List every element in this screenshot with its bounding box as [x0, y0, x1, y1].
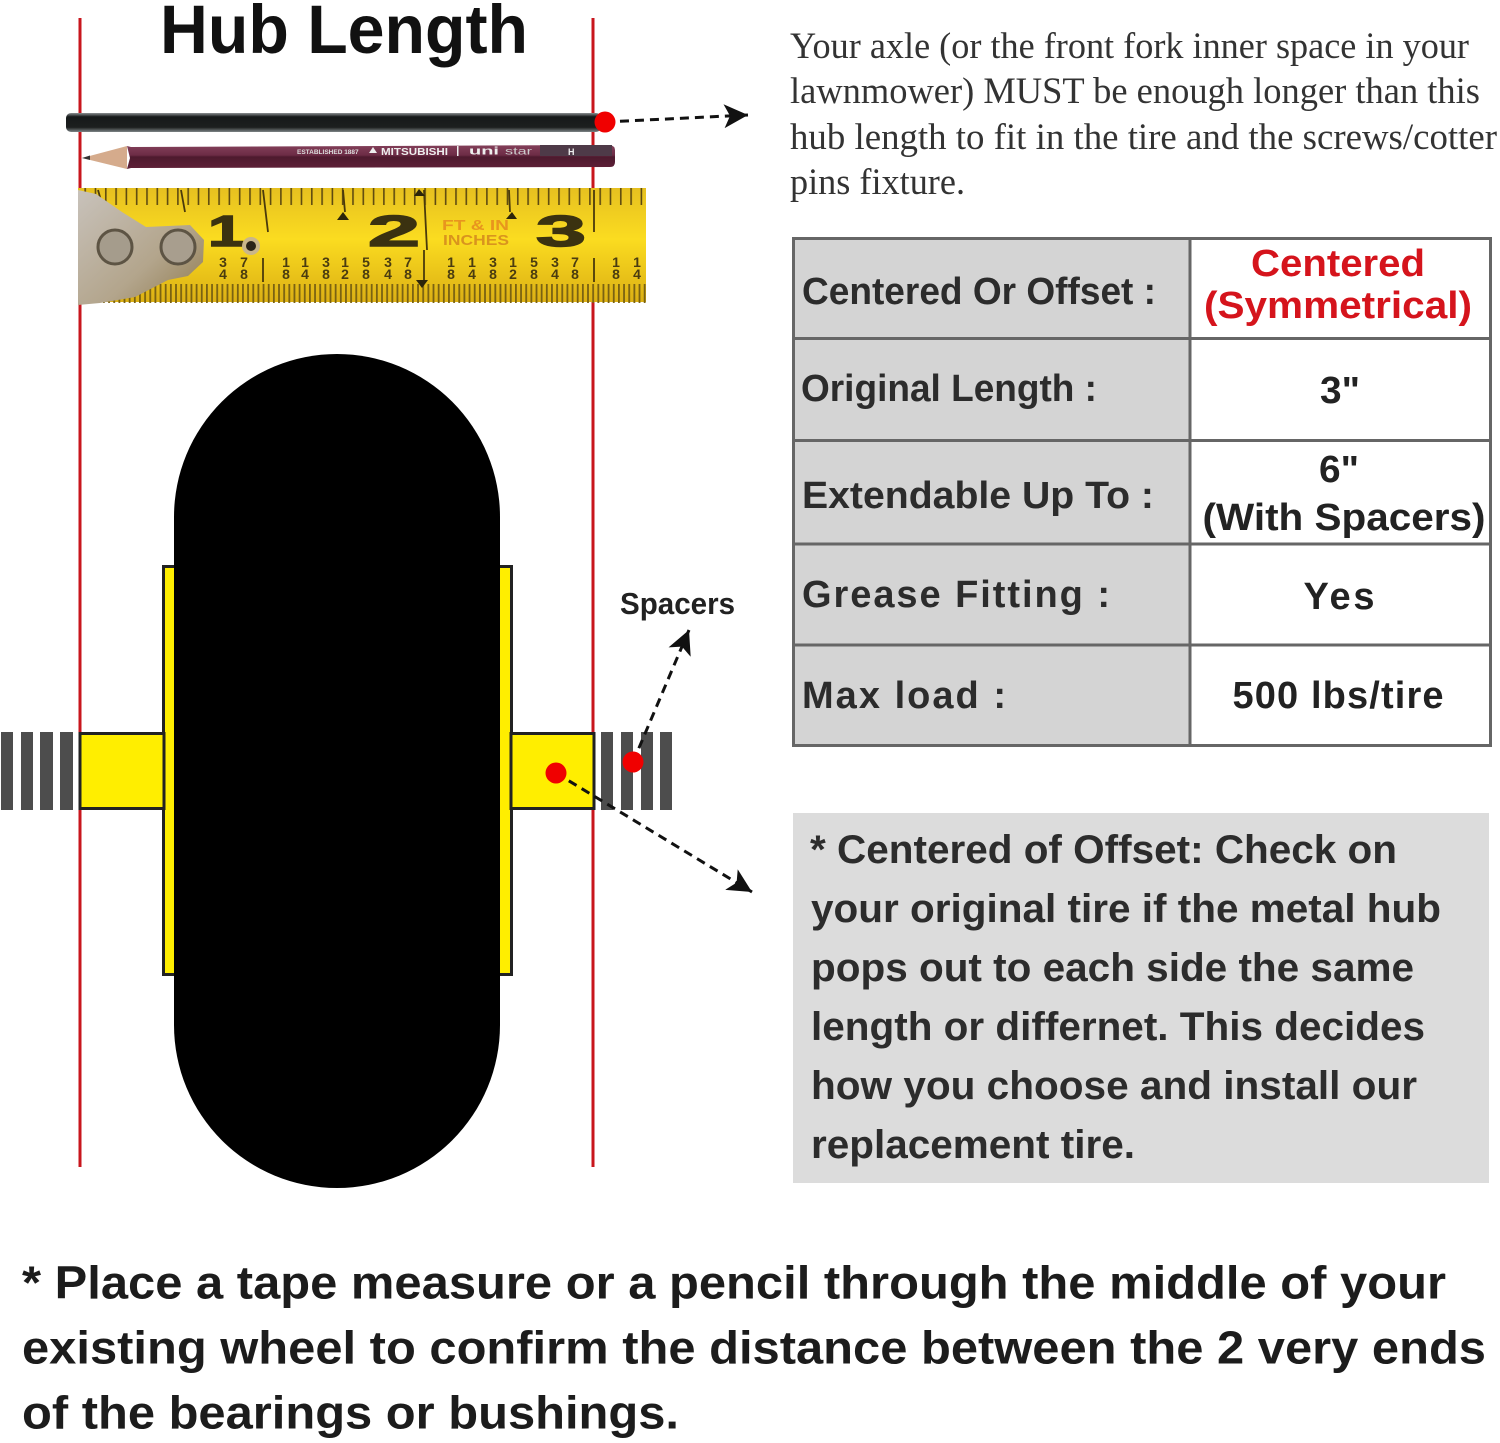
tape fractions: 3 [551, 254, 559, 270]
tape numbers: FT & IN [442, 217, 509, 234]
right red guide line [592, 18, 594, 1167]
specification table [793, 238, 1491, 746]
tape fractions: 8 [282, 266, 290, 282]
tape numbers: INCHES [443, 232, 509, 249]
tape fractions: 8 [404, 266, 412, 282]
left red guide line [78, 18, 82, 1167]
row: max load: Max load : [802, 675, 1006, 717]
centered or offset note panel: pops out to each side the same [811, 946, 1414, 990]
tape fractions: 1 [301, 254, 309, 270]
tape fractions: 4 [551, 266, 559, 282]
tape fractions: 8 [571, 266, 579, 282]
tape fractions: 8 [240, 266, 248, 282]
tape fractions: 2 [509, 266, 517, 282]
row: extendable: (With Spacers) [1202, 497, 1486, 539]
purple pencil: uni [469, 146, 499, 158]
tape fractions: 4 [384, 266, 392, 282]
tape fractions: 4 [468, 266, 476, 282]
row: centered or offset [802, 243, 1472, 327]
tape fractions: 7 [404, 254, 412, 270]
row: extendable [802, 449, 1486, 539]
bottom instruction text: * Place a tape measure or a pencil through the middle of your [22, 1256, 1446, 1308]
centered or offset note panel: how you choose and install our [811, 1064, 1417, 1108]
purple pencil [82, 145, 615, 169]
row: centered or offset: Centered [1251, 243, 1425, 285]
centered or offset note panel: * Centered of Offset: Check on [810, 828, 1397, 872]
row: centered or offset: (Symmetrical) [1204, 285, 1472, 327]
tape fractions: 3 [322, 254, 330, 270]
tape fractions: 4 [633, 266, 641, 282]
axle note paragraph [790, 26, 1497, 203]
tape fractions: 7 [571, 254, 579, 270]
tape fractions: 8 [447, 266, 455, 282]
centered or offset note panel: your original tire if the metal hub [811, 887, 1441, 931]
purple pencil: MITSUBISHI [381, 146, 448, 158]
right bearing axle [511, 734, 594, 808]
tape fractions: 1 [447, 254, 455, 270]
row: original length [801, 368, 1360, 412]
metal hook [78, 190, 204, 305]
tape fractions: 8 [489, 266, 497, 282]
hub arrow [546, 762, 752, 892]
tape measure [78, 188, 646, 305]
bottom instruction text [22, 1256, 1486, 1438]
row: extendable: 6" [1319, 449, 1359, 491]
row: centered or offset: Centered Or Offset : [802, 271, 1156, 313]
tape fractions: 1 [509, 254, 517, 270]
tape numbers: 1 [208, 207, 244, 256]
red dot and arrow to hub length text [594, 112, 748, 132]
axle note paragraph: lawnmower) MUST be enough longer than this [790, 71, 1480, 112]
axle note paragraph: Your axle (or the front fork inner space in your [790, 26, 1469, 67]
left spacers [1, 732, 73, 810]
spacer arrow [622, 630, 689, 772]
spacers label: Spacers [620, 586, 735, 621]
tape fractions: 2 [341, 266, 349, 282]
tape fractions: 1 [633, 254, 641, 270]
black pencil [66, 113, 601, 132]
tape fractions: 8 [530, 266, 538, 282]
purple pencil: ESTABLISHED 1887 [297, 149, 359, 156]
axle note paragraph: hub length to fit in the tire and the screws/cotter [790, 117, 1497, 158]
tape fractions: 8 [612, 266, 620, 282]
purple pencil: star [505, 146, 533, 158]
purple pencil: H [568, 147, 574, 157]
row: original length: Original Length : [801, 368, 1097, 410]
tape fractions: 4 [301, 266, 309, 282]
tape fractions [219, 254, 641, 282]
tape numbers [208, 207, 586, 256]
tape fractions: 7 [240, 254, 248, 270]
tire [174, 354, 500, 1188]
tape fractions: 3 [384, 254, 392, 270]
tape fractions: 4 [219, 266, 227, 282]
row: grease fitting: Yes [1304, 576, 1374, 618]
tape fractions: 5 [362, 254, 370, 270]
tape fractions: 1 [282, 254, 290, 270]
axle note paragraph: pins fixture. [790, 162, 965, 203]
tape numbers: 2 [368, 207, 420, 256]
row: grease fitting: Grease Fitting : [802, 574, 1110, 616]
centered or offset note panel: length or differnet. This decides [811, 1005, 1425, 1049]
bottom instruction text: of the bearings or bushings. [22, 1386, 679, 1438]
tape fractions: 1 [341, 254, 349, 270]
tape fractions: 8 [322, 266, 330, 282]
row: extendable: Extendable Up To : [802, 475, 1154, 517]
tape fractions: 3 [489, 254, 497, 270]
right spacers [601, 732, 672, 810]
tape fractions: 1 [612, 254, 620, 270]
tape fractions: 3 [219, 254, 227, 270]
tape fractions: 1 [468, 254, 476, 270]
bottom instruction text: existing wheel to confirm the distance between the 2 very ends [22, 1322, 1486, 1374]
wheel hub flange [164, 566, 512, 974]
row: max load: 500 lbs/tire [1232, 675, 1444, 717]
tape numbers: 3 [536, 207, 586, 256]
tape fractions: 5 [530, 254, 538, 270]
centered or offset note panel: replacement tire. [811, 1123, 1135, 1167]
centered or offset note panel [793, 813, 1489, 1183]
row: original length: 3" [1320, 370, 1360, 412]
row: grease fitting [802, 574, 1374, 618]
left bearing axle [80, 734, 164, 808]
row: max load [802, 675, 1444, 717]
tape fractions: 8 [362, 266, 370, 282]
